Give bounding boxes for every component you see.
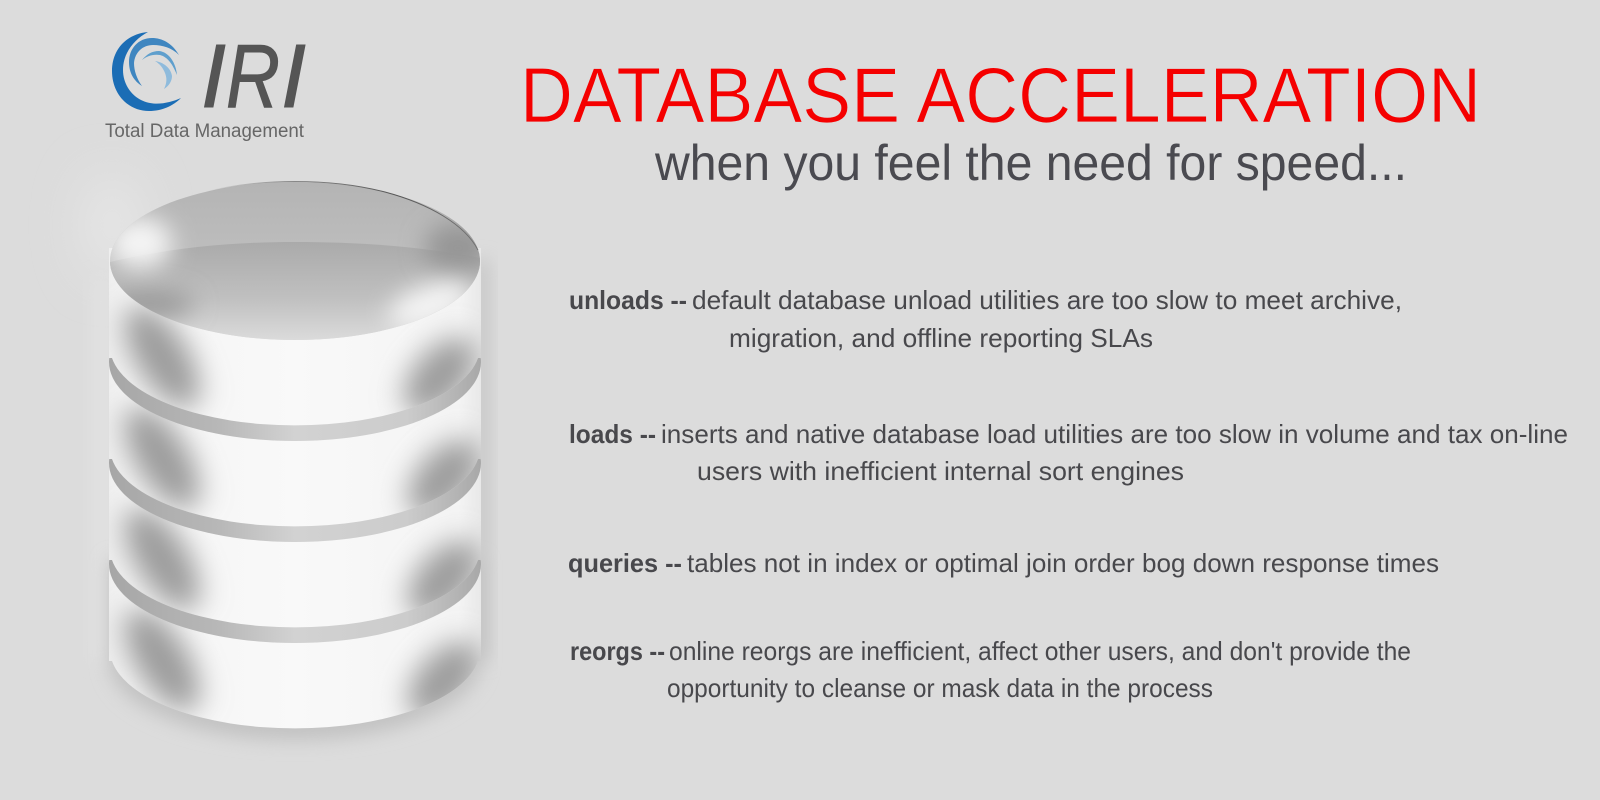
logo wordmark: I xyxy=(201,27,226,127)
cylinder glow and shadow xyxy=(84,175,488,740)
text block: loads: inserts and native database load utilities are too slow in volume and tax on-line xyxy=(661,419,1568,449)
text block: queries: tables not in index or optimal join order bog down response times xyxy=(687,548,1439,578)
text block: queries: queries -- xyxy=(568,548,682,578)
logo wordmark xyxy=(201,27,306,127)
layer 1 xyxy=(109,248,490,428)
logo wordmark: I xyxy=(281,27,306,127)
layer 4 xyxy=(109,560,481,728)
text block: loads: loads -- xyxy=(569,419,656,449)
text block: unloads xyxy=(569,285,1402,353)
text block: loads xyxy=(569,419,1568,486)
text block: reorgs: online reorgs are inefficient, affect other users, and don't provide the xyxy=(669,636,1411,666)
text block: unloads: default database unload utilities are too slow to meet archive, xyxy=(692,285,1402,315)
logo: IRI Total Data Management xyxy=(105,27,306,142)
cylinder top face xyxy=(106,182,492,345)
subtitle: when you feel the need for speed... xyxy=(654,135,1407,191)
logo wordmark: R xyxy=(226,27,280,127)
icon: database cylinder xyxy=(84,175,494,740)
layer 2 xyxy=(109,358,481,526)
text block: reorgs: reorgs -- xyxy=(570,636,665,666)
text block: loads: users with inefficient internal sort engines xyxy=(697,456,1184,486)
logo tagline: Total Data Management xyxy=(105,121,305,142)
text block: unloads: unloads -- xyxy=(569,285,687,315)
text block: reorgs xyxy=(570,636,1411,703)
text block: reorgs: opportunity to cleanse or mask data in the process xyxy=(667,673,1213,703)
icon: blue swirl xyxy=(112,32,181,111)
title: DATABASE ACCELERATION xyxy=(520,51,1481,139)
text block: unloads: migration, and offline reporting SLAs xyxy=(729,323,1153,353)
layer 3 xyxy=(109,459,481,628)
